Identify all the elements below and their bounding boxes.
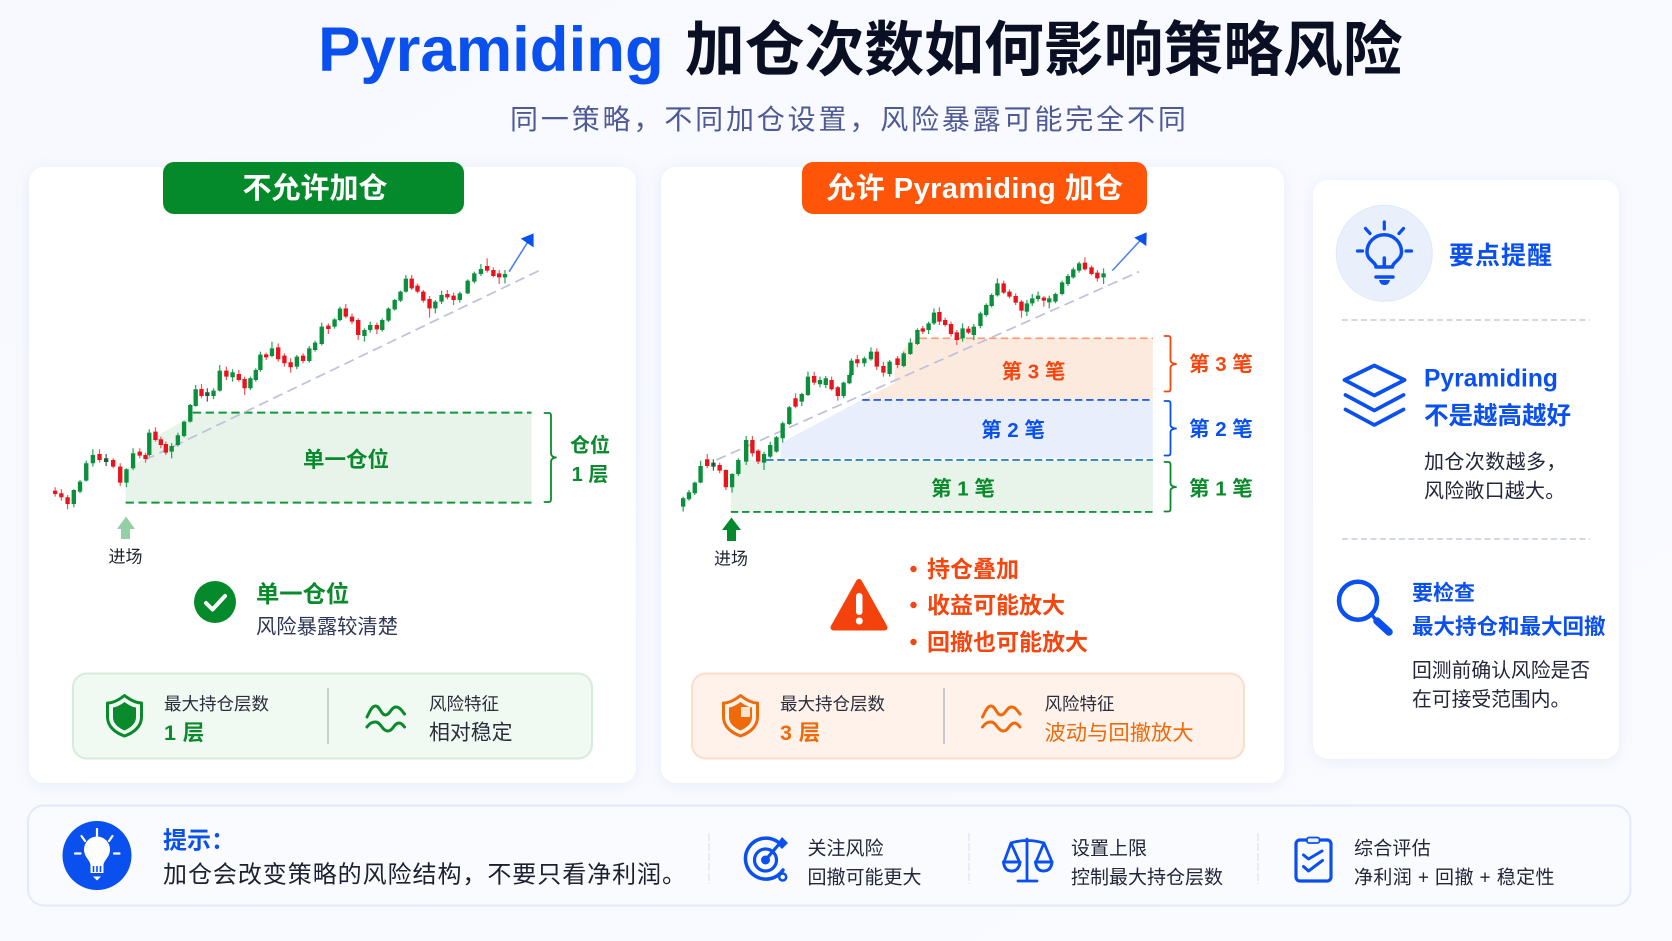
icon: checklist bbox=[1296, 838, 1331, 881]
item: set limit bbox=[1071, 838, 1223, 888]
zone label: entry 1: 第 1 笔 bbox=[931, 476, 995, 500]
heading: key reminders: 要点提醒 bbox=[1449, 242, 1553, 270]
icon: light bulb bbox=[1336, 205, 1432, 301]
callout: risk bullets bbox=[910, 556, 1088, 655]
icon: wave bbox=[982, 706, 1020, 731]
stat: risk profile: 风险特征 bbox=[429, 694, 499, 714]
stat: risk profile bbox=[1044, 694, 1194, 745]
icon: layers bbox=[1344, 366, 1404, 425]
entry label: 进场 bbox=[714, 550, 748, 568]
item: overall evaluation: 净利润 + 回撤 + 稳定性 bbox=[1354, 866, 1555, 888]
note: what to check: 最大持仓和最大回撤 bbox=[1412, 615, 1606, 639]
stat: risk profile bbox=[429, 694, 513, 744]
panel: no pyramiding bbox=[29, 162, 636, 783]
stat box: single position bbox=[73, 674, 592, 758]
stat: max layers: 最大持仓层数 bbox=[164, 694, 269, 714]
callout: single position: 单一仓位 bbox=[256, 580, 349, 607]
header: no pyramiding: 不允许加仓 bbox=[242, 172, 388, 205]
subtitle: 同一策略，不同加仓设置，风险暴露可能完全不同 bbox=[510, 104, 1189, 135]
zone label: entry 3: 第 3 笔 bbox=[1002, 360, 1065, 384]
item: overall evaluation: 综合评估 bbox=[1354, 838, 1431, 860]
icon: warning bbox=[834, 582, 884, 628]
stat: max layers bbox=[780, 694, 885, 745]
note: pyramiding: 不是越高越好 bbox=[1424, 402, 1571, 430]
callout: risk bullets: 收益可能放大 bbox=[927, 592, 1065, 618]
brace label: 仓位 bbox=[570, 433, 610, 457]
icon: balance scale bbox=[1004, 839, 1052, 881]
brace label: 1 层 bbox=[572, 464, 608, 486]
callout: single position: 风险暴露较清楚 bbox=[256, 616, 398, 638]
callout: risk bullets: 持仓叠加 bbox=[927, 556, 1019, 582]
brace: entry 3: 第 3 笔 bbox=[1189, 352, 1253, 376]
icon: magnifier bbox=[1339, 582, 1389, 632]
header: pyramiding allowed: 允许 Pyramiding 加仓 bbox=[826, 172, 1124, 205]
stat: max layers bbox=[164, 694, 269, 745]
zone label: single position: 单一仓位 bbox=[303, 447, 389, 472]
item: watch risk: 回撤可能更大 bbox=[808, 866, 922, 888]
panel: key reminders bbox=[1313, 180, 1619, 759]
note: pyramiding: 风险敞口越大。 bbox=[1424, 480, 1565, 502]
note: pyramiding: Pyramiding bbox=[1424, 366, 1558, 392]
note: what to check: 回测前确认风险是否 bbox=[1412, 660, 1590, 682]
item: watch risk bbox=[808, 838, 922, 888]
item: overall evaluation bbox=[1354, 838, 1555, 888]
stat: risk profile: 相对稳定 bbox=[429, 722, 513, 744]
callout: risk bullets: 回撤也可能放大 bbox=[927, 629, 1088, 655]
stat: risk profile: 风险特征 bbox=[1044, 694, 1114, 714]
title: 加仓次数如何影响策略风险 bbox=[685, 16, 1403, 84]
arrow: entry bbox=[117, 516, 135, 539]
icon: shield bbox=[724, 696, 758, 736]
header: pyramiding allowed bbox=[802, 162, 1147, 214]
item: watch risk: 关注风险 bbox=[808, 838, 884, 860]
icon: tip bulb bbox=[62, 821, 132, 890]
item: set limit: 设置上限 bbox=[1071, 838, 1147, 860]
note: pyramiding bbox=[1424, 366, 1571, 502]
panel: bottom tip bar bbox=[28, 806, 1630, 906]
tip text bbox=[163, 828, 687, 888]
brace label bbox=[570, 433, 610, 486]
callout: single position bbox=[256, 580, 398, 638]
note: what to check bbox=[1412, 581, 1606, 711]
stat: max layers: 3 层 bbox=[780, 721, 821, 745]
title bbox=[318, 15, 1403, 85]
brace: entry 3 bbox=[1164, 336, 1253, 392]
note: pyramiding: 加仓次数越多， bbox=[1424, 450, 1567, 474]
brace: entry 2: 第 2 笔 bbox=[1189, 417, 1253, 441]
stat: max layers: 最大持仓层数 bbox=[780, 694, 885, 714]
candlestick chart: three entries bbox=[683, 232, 1153, 512]
title: Pyramiding bbox=[318, 15, 664, 85]
tip text: 提示： bbox=[163, 828, 235, 854]
tip text: 加仓会改变策略的风险结构，不要只看净利润。 bbox=[163, 862, 687, 888]
stat: risk profile: 波动与回撤放大 bbox=[1044, 721, 1194, 745]
brace: entry 1 bbox=[1164, 462, 1253, 512]
entry label: 进场 bbox=[108, 548, 142, 566]
note: what to check: 要检查 bbox=[1412, 581, 1475, 605]
header: no pyramiding bbox=[163, 162, 464, 214]
icon: shield bbox=[108, 696, 142, 736]
note: what to check: 在可接受范围内。 bbox=[1412, 689, 1570, 711]
stat box: pyramiding bbox=[692, 674, 1244, 758]
arrow: entry bbox=[722, 518, 741, 541]
brace: position layers bbox=[544, 413, 556, 502]
icon: target bbox=[745, 837, 788, 880]
zone label: entry 2: 第 2 笔 bbox=[981, 418, 1045, 442]
panel: pyramiding allowed bbox=[661, 162, 1284, 783]
brace: entry 1: 第 1 笔 bbox=[1189, 476, 1253, 500]
candlestick chart: single position bbox=[55, 233, 539, 509]
stat: max layers: 1 层 bbox=[164, 721, 205, 745]
brace: entry 2 bbox=[1164, 401, 1253, 456]
icon: wave bbox=[367, 706, 404, 731]
icon: check bbox=[194, 581, 236, 623]
item: set limit: 控制最大持仓层数 bbox=[1071, 866, 1223, 888]
